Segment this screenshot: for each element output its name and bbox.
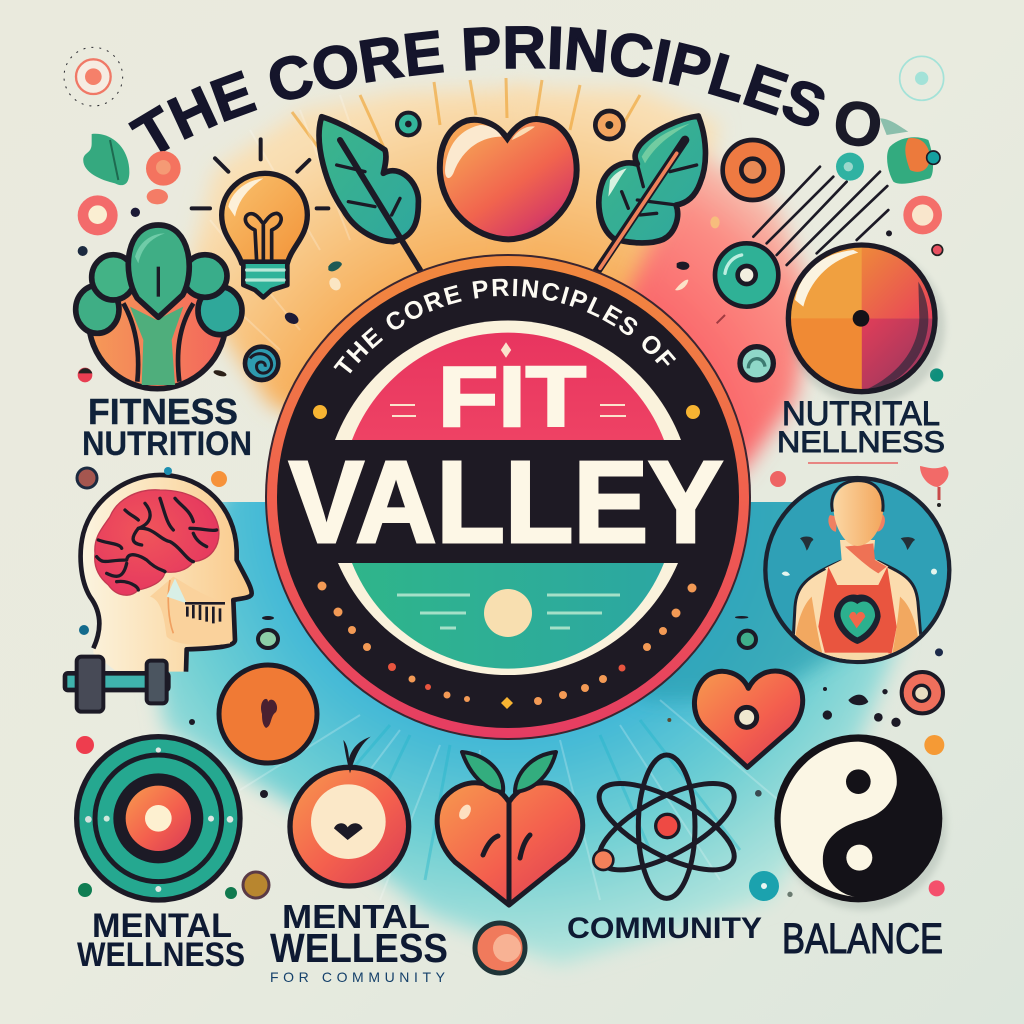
icon: left leaf [319,117,420,270]
label: mental welless for community: FOR COMMUNITY [270,969,446,985]
icon: broccoli [76,225,242,389]
icon: bottom apple [290,737,409,886]
label: nutrital nellness (right): NELLNESS [777,426,945,459]
icon: atom [587,755,746,898]
icon: right leaf [597,116,705,272]
label: nutrital nellness (right) [777,395,945,459]
label: mental wellness (left): MENTAL [92,907,232,945]
icon: heart with ring [694,671,803,767]
badge arc text: THE CORE PRINCIPLES OF [333,278,676,374]
title: curved heading: O [829,87,887,162]
label: mental welless for community: WELLESS [270,925,448,971]
icon: dumbbell [65,657,168,712]
decorative strokes and blobs: top right [675,56,944,382]
badge lower green segment [338,563,678,675]
label: mental wellness (left): WELLNESS [77,936,245,974]
sunburst background [145,78,900,965]
icon: small teal ring [740,347,773,380]
badge word: FIT: FIT [438,350,586,445]
label: nutrition (left): FITNESS [88,391,238,432]
small marks near person [770,463,949,507]
icon: orange target ring [723,140,783,200]
label: balance: BALANCE [782,915,943,963]
icon: orange fruit circle [219,665,317,763]
label: mental welless for community: MENTAL [282,898,430,935]
icon: top apple [440,119,577,239]
icon: target ring top center [595,111,623,139]
decorative dots: right side [667,616,945,901]
label: mental welless for community [270,898,448,985]
icon: light bulb [192,139,328,297]
badge upper pink segment [335,321,681,440]
badge dots [313,405,700,709]
icon: yin yang [774,734,947,910]
label: community: COMMUNITY [567,912,762,945]
decorative dots: left side [76,467,278,899]
icon: person with heart [765,478,949,667]
icon: heart peach [437,752,583,905]
label: nutrition (left) [82,391,252,463]
central badge [265,254,751,740]
icon: small bottom target [475,923,525,973]
icon: head with brain [81,475,252,672]
icon: concentric target [77,737,240,900]
badge word: VALLEY: VALLEY [289,437,723,567]
label: nutrition (left): NUTRITION [82,425,252,463]
pie chart wheel [788,245,945,405]
label: mental wellness (left) [77,907,245,974]
icon: teal eye ring [715,243,778,307]
title: curved heading: THE CORE PRINCIPLES [128,26,825,152]
decorative dots and rings: top left [64,47,420,382]
label: nutrital nellness (right): NUTRITAL [782,395,940,433]
